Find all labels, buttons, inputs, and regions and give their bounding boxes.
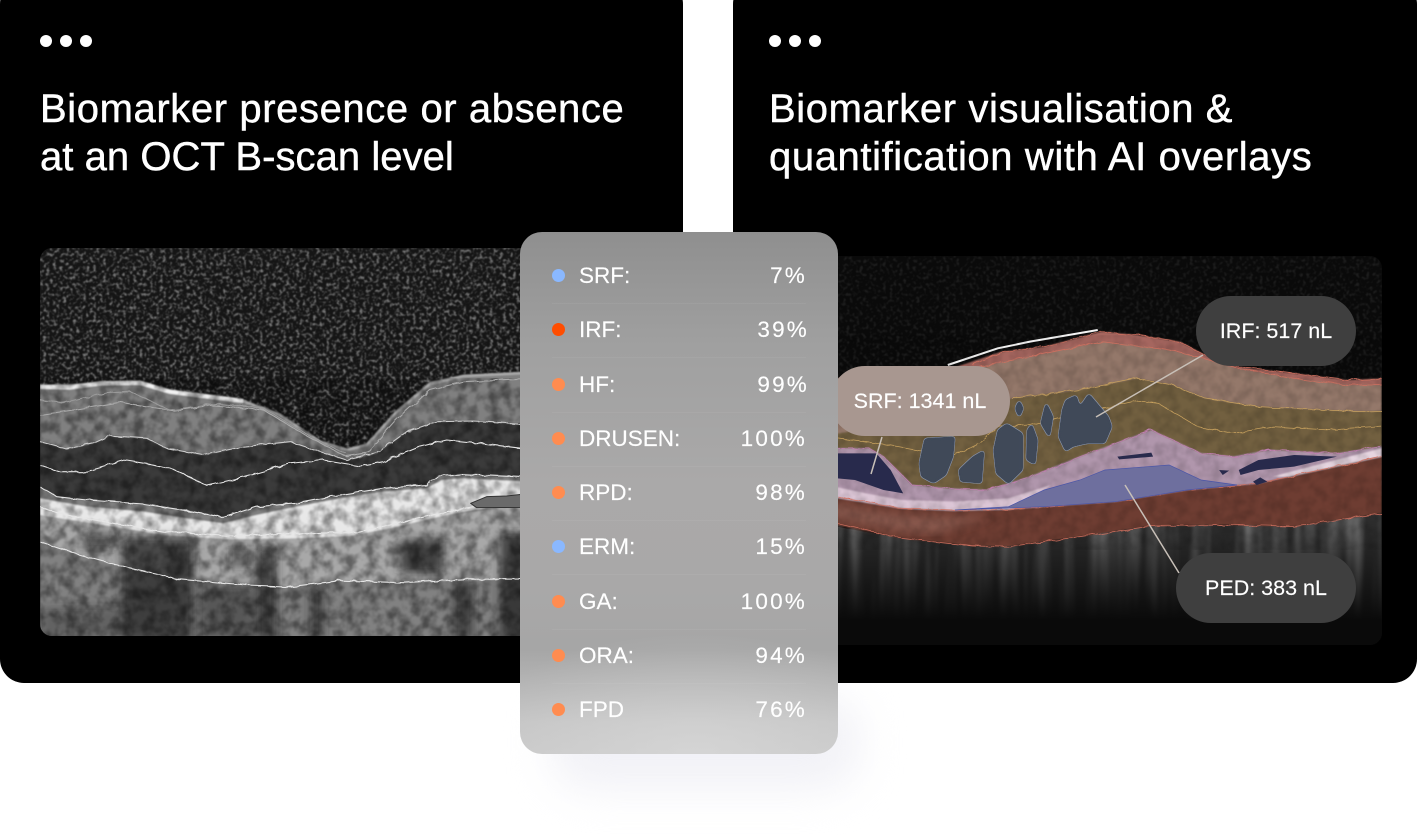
callout: IRF volume: IRF: 517 nL xyxy=(1220,319,1332,343)
row: IRF: 39% xyxy=(757,317,809,342)
heading: presence or absence: Biomarker presence or absence xyxy=(40,86,624,130)
connector: SRF xyxy=(871,437,882,474)
heading: visualisation and quantification: quantification with AI overlays xyxy=(769,134,1312,178)
panel: biomarker presence xyxy=(0,0,683,683)
callout: IRF volume xyxy=(1196,296,1356,366)
row: FPD: 76% xyxy=(755,697,807,722)
row: SRF xyxy=(552,249,806,304)
panel: biomarker quantification xyxy=(733,0,1417,683)
row: GA: GA: xyxy=(579,588,618,614)
glass panel shadow xyxy=(550,695,860,790)
IRF overlays xyxy=(919,393,1112,484)
row: IRF: IRF: xyxy=(579,317,622,342)
heading: presence or absence: at an OCT B-scan level xyxy=(40,134,454,178)
callout: PED volume xyxy=(1176,553,1356,623)
callout: SRF volume: SRF: 1341 nL xyxy=(854,389,986,413)
SRF overlays xyxy=(819,453,1337,493)
callout: SRF volume xyxy=(830,366,1010,436)
row: GA: 100% xyxy=(741,588,807,614)
layer boundary lines xyxy=(40,378,530,587)
row: HF: 99% xyxy=(757,372,809,396)
row: SRF: 7% xyxy=(770,263,807,288)
row: FPD: FPD xyxy=(579,697,624,722)
row: RPD: RPD: xyxy=(579,480,633,505)
row: FPD xyxy=(552,697,807,722)
row: RPD xyxy=(552,466,806,521)
heading: visualisation and quantification: Biomarker visualisation & xyxy=(769,86,1233,130)
row: GA xyxy=(552,574,806,630)
row: HF xyxy=(552,358,806,412)
row: DRUSEN: 100% xyxy=(741,426,807,451)
row: DRUSEN: DRUSEN: xyxy=(579,426,680,451)
window dots xyxy=(40,35,92,47)
connector: PED xyxy=(1125,485,1179,573)
heading: visualisation and quantification xyxy=(769,86,1312,179)
panel: biomarker percentages xyxy=(520,232,838,754)
row: HF: HF: xyxy=(579,372,615,396)
row: ERM: 15% xyxy=(755,534,807,559)
OCT scans xyxy=(40,248,1382,645)
sub-retinal streaks xyxy=(838,514,1382,598)
heading: presence or absence xyxy=(40,86,624,178)
row: ORA: 94% xyxy=(755,643,807,668)
row: DRUSEN xyxy=(552,412,806,467)
callout: PED volume: PED: 383 nL xyxy=(1205,576,1327,600)
right OCT scan with AI overlays xyxy=(819,256,1382,645)
connector: IRF xyxy=(1096,355,1203,417)
row: ERM xyxy=(552,520,806,575)
PED overlay xyxy=(955,465,1237,510)
window dots xyxy=(769,35,821,47)
row: RPD: 98% xyxy=(755,480,807,505)
row: ORA: ORA: xyxy=(579,643,634,668)
left OCT scan xyxy=(40,248,540,640)
row: ERM: ERM: xyxy=(579,534,635,559)
row: SRF: SRF: xyxy=(579,263,630,288)
row: ORA xyxy=(552,629,806,684)
row: IRF xyxy=(552,303,806,358)
fluid blob xyxy=(470,494,520,508)
